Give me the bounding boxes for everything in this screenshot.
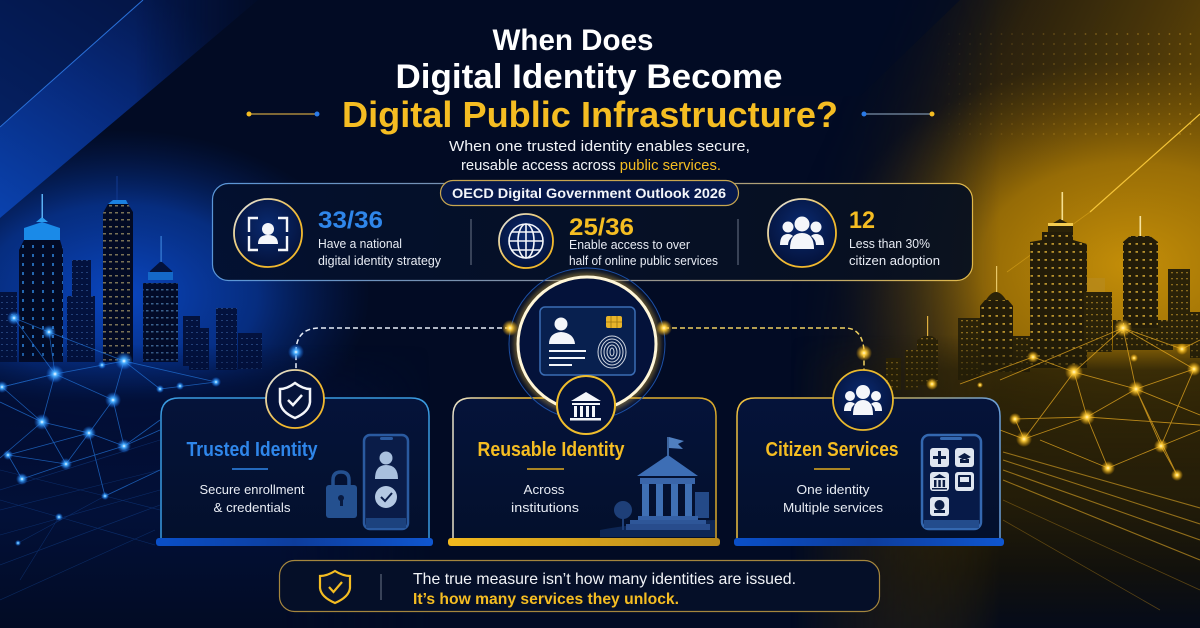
connector: right dashed bbox=[664, 328, 872, 372]
description: One identity bbox=[796, 482, 870, 497]
stat: 12: citizen adoption bbox=[849, 254, 940, 268]
icon: globe bbox=[499, 214, 553, 268]
heading: Citizen Services bbox=[766, 439, 898, 461]
subtitle: When one trusted identity enables secure, bbox=[449, 138, 750, 155]
network: blue bbox=[0, 311, 221, 600]
statement text bbox=[413, 571, 796, 608]
stat: 25/36 bbox=[569, 214, 718, 268]
network: gold bbox=[926, 319, 1200, 610]
heading: Reusable Identity bbox=[478, 439, 625, 461]
statement text: It’s how many services they unlock. bbox=[413, 591, 679, 608]
ground fade left bbox=[0, 350, 344, 582]
gold city skyline bbox=[886, 192, 1200, 390]
statement text: The true measure isn’t how many identities are issued. bbox=[413, 571, 796, 588]
icon: padlock bbox=[326, 472, 357, 518]
icon: phone with user bbox=[364, 435, 408, 529]
subtitle: reusable access across public services. bbox=[461, 157, 721, 174]
blue city skyline bbox=[0, 176, 262, 370]
card: Reusable Identity bbox=[448, 398, 720, 546]
description bbox=[200, 482, 305, 515]
stat: 12 bbox=[849, 207, 940, 268]
panel: OECD statistics bbox=[212, 180, 972, 280]
description: Secure enrollment bbox=[200, 482, 305, 497]
stat: 25/36: Enable access to over bbox=[569, 238, 690, 252]
stat: 12: Less than 30% bbox=[849, 237, 930, 251]
icon: shield badge bbox=[266, 370, 324, 428]
ground fade right bbox=[865, 338, 1200, 628]
connector: left dashed bbox=[288, 328, 510, 372]
stat: 33/36 bbox=[318, 207, 442, 268]
icon: citizens badge bbox=[833, 370, 893, 430]
icon: phone with service tiles bbox=[922, 435, 981, 529]
title: When Does bbox=[492, 24, 654, 57]
icon: government building bbox=[600, 437, 715, 537]
central ID emblem bbox=[502, 268, 672, 434]
stat: 12: 12 bbox=[849, 207, 875, 234]
description: & credentials bbox=[214, 500, 291, 515]
icon: institution badge bbox=[557, 376, 615, 434]
title accent right bbox=[862, 112, 934, 116]
stat: 25/36: half of online public services bbox=[569, 254, 718, 268]
title: Digital Identity Become bbox=[396, 58, 782, 96]
stat: 33/36: digital identity strategy bbox=[318, 254, 442, 268]
description: institutions bbox=[511, 500, 580, 515]
card: Citizen Services bbox=[734, 370, 1004, 546]
stat: 25/36: 25/36 bbox=[569, 214, 634, 241]
callout: closing statement bbox=[280, 560, 880, 612]
stat: 33/36: Have a national bbox=[318, 237, 402, 251]
description bbox=[783, 482, 884, 515]
description: Multiple services bbox=[783, 500, 884, 515]
pill: source label: OECD Digital Government Outlook 2026 bbox=[452, 185, 726, 201]
description: Across bbox=[524, 482, 565, 497]
title accent left bbox=[246, 112, 320, 116]
icon: citizens bbox=[768, 199, 836, 267]
card: Trusted Identity bbox=[156, 370, 433, 546]
ID card bbox=[540, 307, 635, 375]
subtitle bbox=[449, 138, 750, 174]
title bbox=[342, 24, 838, 135]
icon: gold shield bbox=[320, 571, 350, 603]
pill: source label bbox=[440, 180, 738, 206]
title: Digital Public Infrastructure? bbox=[342, 94, 838, 135]
description bbox=[511, 482, 580, 515]
icon: face scan bbox=[234, 199, 302, 267]
heading: Trusted Identity bbox=[186, 439, 318, 461]
stat: 33/36: 33/36 bbox=[318, 207, 383, 234]
